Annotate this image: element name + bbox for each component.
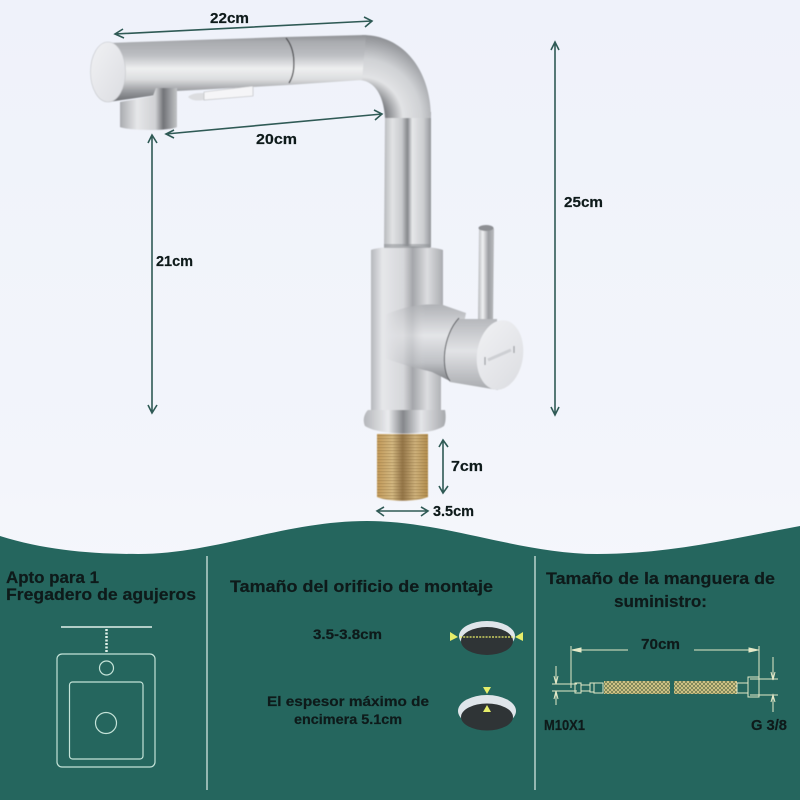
dimension: 20cm: 20cm: [256, 131, 297, 148]
lever tip: [478, 225, 494, 231]
thread shank: [377, 434, 428, 501]
divider: [206, 556, 208, 790]
body collar: [384, 244, 430, 248]
faucet pull-out head: [108, 35, 366, 102]
panel: supply hose size: [544, 570, 787, 734]
green wave panel: [0, 521, 800, 800]
handle cylinder: [444, 319, 498, 390]
dimension: 3.5cm: [377, 503, 474, 520]
dimension: 7cm: 7cm: [451, 458, 483, 475]
dimension: 7cm: [439, 440, 483, 493]
spout end disc: [90, 42, 126, 102]
aerator: [120, 88, 177, 130]
label: right thread: G 3/8: [751, 718, 787, 734]
icon: sink top view: [57, 627, 155, 767]
divider: [534, 556, 536, 790]
dimension: 22cm: [115, 10, 372, 38]
dimension: 22cm: 22cm: [210, 10, 249, 27]
handle end disc with logo: [472, 317, 528, 393]
heading: mounting hole size: Tamaño del orificio de montaje: [230, 578, 493, 596]
diagram: supply hose: [552, 646, 778, 712]
heading: sink compatibility: Apto para 1: [6, 569, 99, 587]
label: hole diameter: 3.5-3.8cm: [313, 626, 382, 642]
icon: hole diameter: [450, 621, 523, 655]
label: left thread: M10X1: [544, 718, 585, 734]
dimension: 20cm: [166, 110, 382, 148]
panel: sink compatibility: [6, 569, 196, 767]
faucet spout bend: [358, 35, 431, 118]
dimension: 3.5cm: 3.5cm: [433, 503, 474, 520]
panel: mounting hole size: [230, 578, 523, 730]
dimension: 25cm: 25cm: [564, 194, 603, 211]
side arm: [396, 304, 466, 380]
label: max counter thickness: El espesor máximo de: [267, 693, 429, 709]
spray trigger: [188, 86, 253, 101]
label: max counter thickness: encimera 5.1cm: [294, 711, 402, 727]
heading: sink compatibility: Fregadero de agujeros: [6, 586, 196, 604]
handle seam: [444, 318, 459, 381]
faucet spout vertical pipe: [384, 112, 431, 250]
faucet product image: [90, 35, 528, 501]
icon: counter thickness: [458, 687, 516, 730]
dimension: 21cm: 21cm: [156, 253, 193, 270]
handle lever: [478, 225, 494, 323]
heading: supply hose size: Tamaño de la manguera de: [546, 570, 775, 588]
faucet body: [371, 246, 443, 412]
label: hose length: 70cm: [641, 637, 680, 653]
head seam: [286, 38, 294, 83]
base flange: [364, 410, 446, 434]
dimension: 25cm: [551, 42, 603, 415]
heading: supply hose size: suministro:: [614, 593, 707, 611]
dimension: 21cm: [148, 135, 193, 413]
